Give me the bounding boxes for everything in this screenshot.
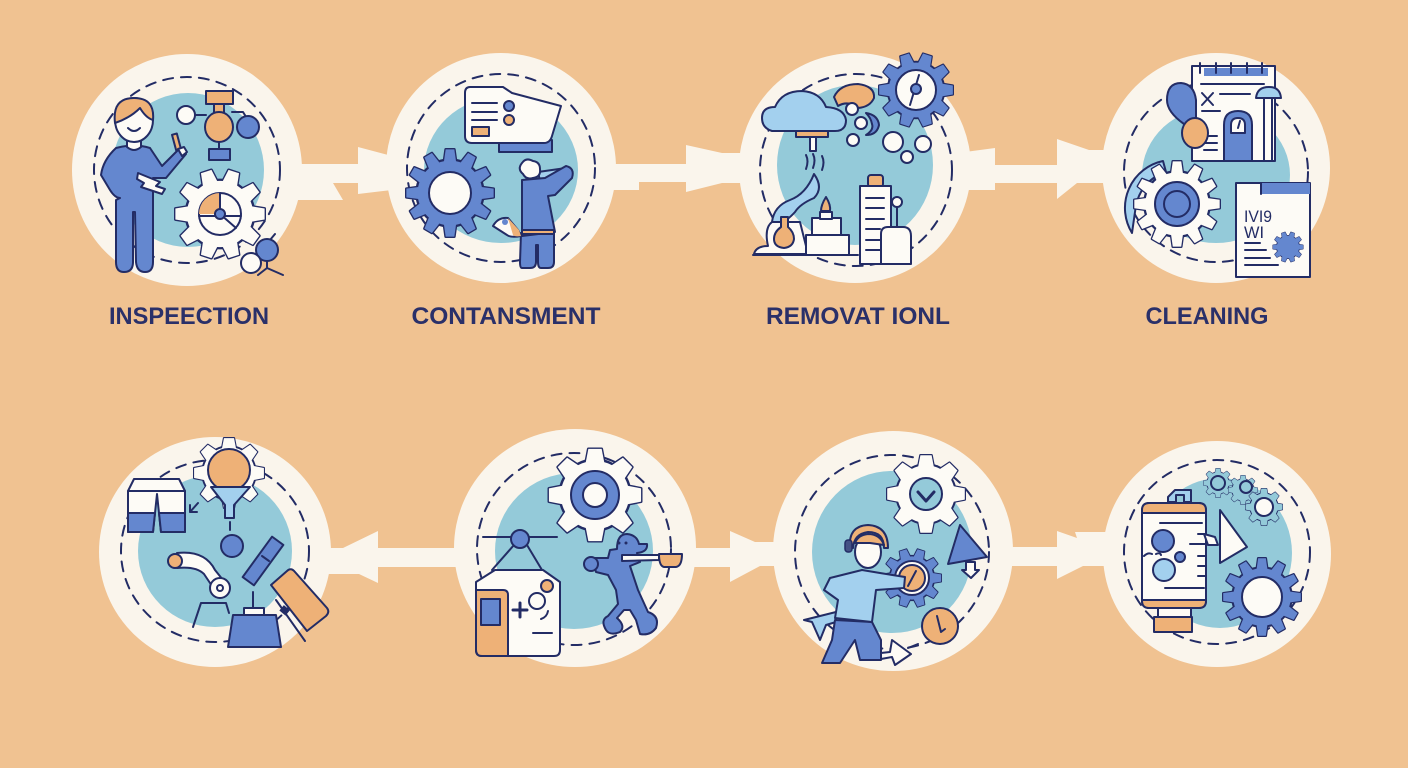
icon: pants [128, 479, 198, 532]
icon: stacked steps with candle [806, 197, 849, 255]
icon: gear with funnel [194, 438, 264, 530]
icon: blue triangle pointer [948, 525, 987, 578]
disc [454, 429, 696, 667]
icon: orange cloud blob [834, 84, 874, 108]
icon: blue gear [1223, 558, 1301, 636]
icon: leaf and orange pod [1167, 83, 1208, 148]
icon: flow diagram [177, 91, 259, 160]
icon: cloud with drips [762, 91, 846, 170]
disc [773, 431, 1013, 671]
icon: plug [881, 640, 918, 665]
dashed ring [760, 74, 952, 266]
icon: hanging machine [476, 530, 560, 656]
dashed ring [477, 453, 671, 645]
teal blob [138, 475, 292, 627]
icon: person with clipboard [101, 98, 187, 272]
icon: small gears [1203, 468, 1282, 525]
icon: bubbles [846, 103, 931, 163]
panel: inspection [72, 54, 302, 330]
panel: lower step four [1103, 441, 1331, 667]
icon: document: IVI9 [1244, 207, 1272, 226]
icon: blue figure with tool [584, 534, 682, 634]
disc [1102, 53, 1330, 283]
arrow: lower step three to four [1008, 531, 1108, 579]
icon: large white gear [549, 449, 641, 541]
icon: worker with gear [804, 525, 941, 663]
dashed ring [94, 77, 280, 263]
label: INSPEECTION [109, 303, 269, 330]
arrow: containment to removation [610, 145, 745, 192]
teal blob [495, 473, 653, 629]
icon: gauge gear [879, 53, 953, 127]
teal blob [1142, 107, 1290, 243]
arrow: second step pointing left to first lower step [326, 531, 460, 583]
panel: lower step two [454, 429, 696, 667]
icon: triangle prism [1204, 510, 1247, 563]
icon: small nodes [241, 234, 283, 275]
icon: document: WI [1244, 223, 1264, 242]
dashed ring [795, 455, 989, 649]
icon: worker [493, 159, 573, 268]
label: CONTANSMENT [412, 303, 601, 330]
icon: building and tank [860, 175, 911, 264]
disc [739, 53, 971, 283]
icon: clock [922, 608, 958, 644]
disc [99, 437, 331, 667]
panel: cleaning [1102, 53, 1330, 330]
icon: robotic arm [168, 553, 230, 627]
teal blob [812, 471, 972, 633]
teal blob [1148, 478, 1292, 628]
panel: removation [739, 53, 971, 330]
panel: lower step one [99, 437, 331, 667]
icon: check gear [887, 455, 965, 533]
icon: monitor [465, 87, 561, 152]
icon: weight [228, 592, 281, 647]
disc [72, 54, 302, 286]
icon: cylinder tank [1142, 490, 1206, 632]
dashed ring [1124, 82, 1308, 262]
disc [386, 53, 616, 283]
teal blob [112, 93, 264, 247]
teal blob [777, 85, 933, 245]
dashed ring [1124, 460, 1310, 644]
label: REMOVAT IONL [766, 303, 950, 330]
teal blob [424, 97, 578, 243]
panel: lower step three [773, 431, 1013, 671]
icon: document [1236, 183, 1310, 277]
icon: blue gear [406, 149, 494, 237]
label: CLEANING [1146, 303, 1268, 330]
icon: white gear with pie dial [175, 169, 265, 259]
icon: notebook with door [1192, 63, 1281, 161]
icon: orange card [271, 569, 328, 641]
icon: gear with arc [1125, 161, 1220, 247]
dashed ring [407, 74, 595, 262]
icon: flask and smoke [753, 174, 858, 255]
icon: node and blue strip [221, 535, 283, 585]
disc [1103, 441, 1331, 667]
arrow: removation to cleaning [965, 139, 1106, 199]
arrow: lower step two to three [690, 531, 778, 582]
panel: containment [386, 53, 616, 330]
dashed ring [121, 460, 309, 642]
arrow: inspection to containment [296, 147, 392, 200]
